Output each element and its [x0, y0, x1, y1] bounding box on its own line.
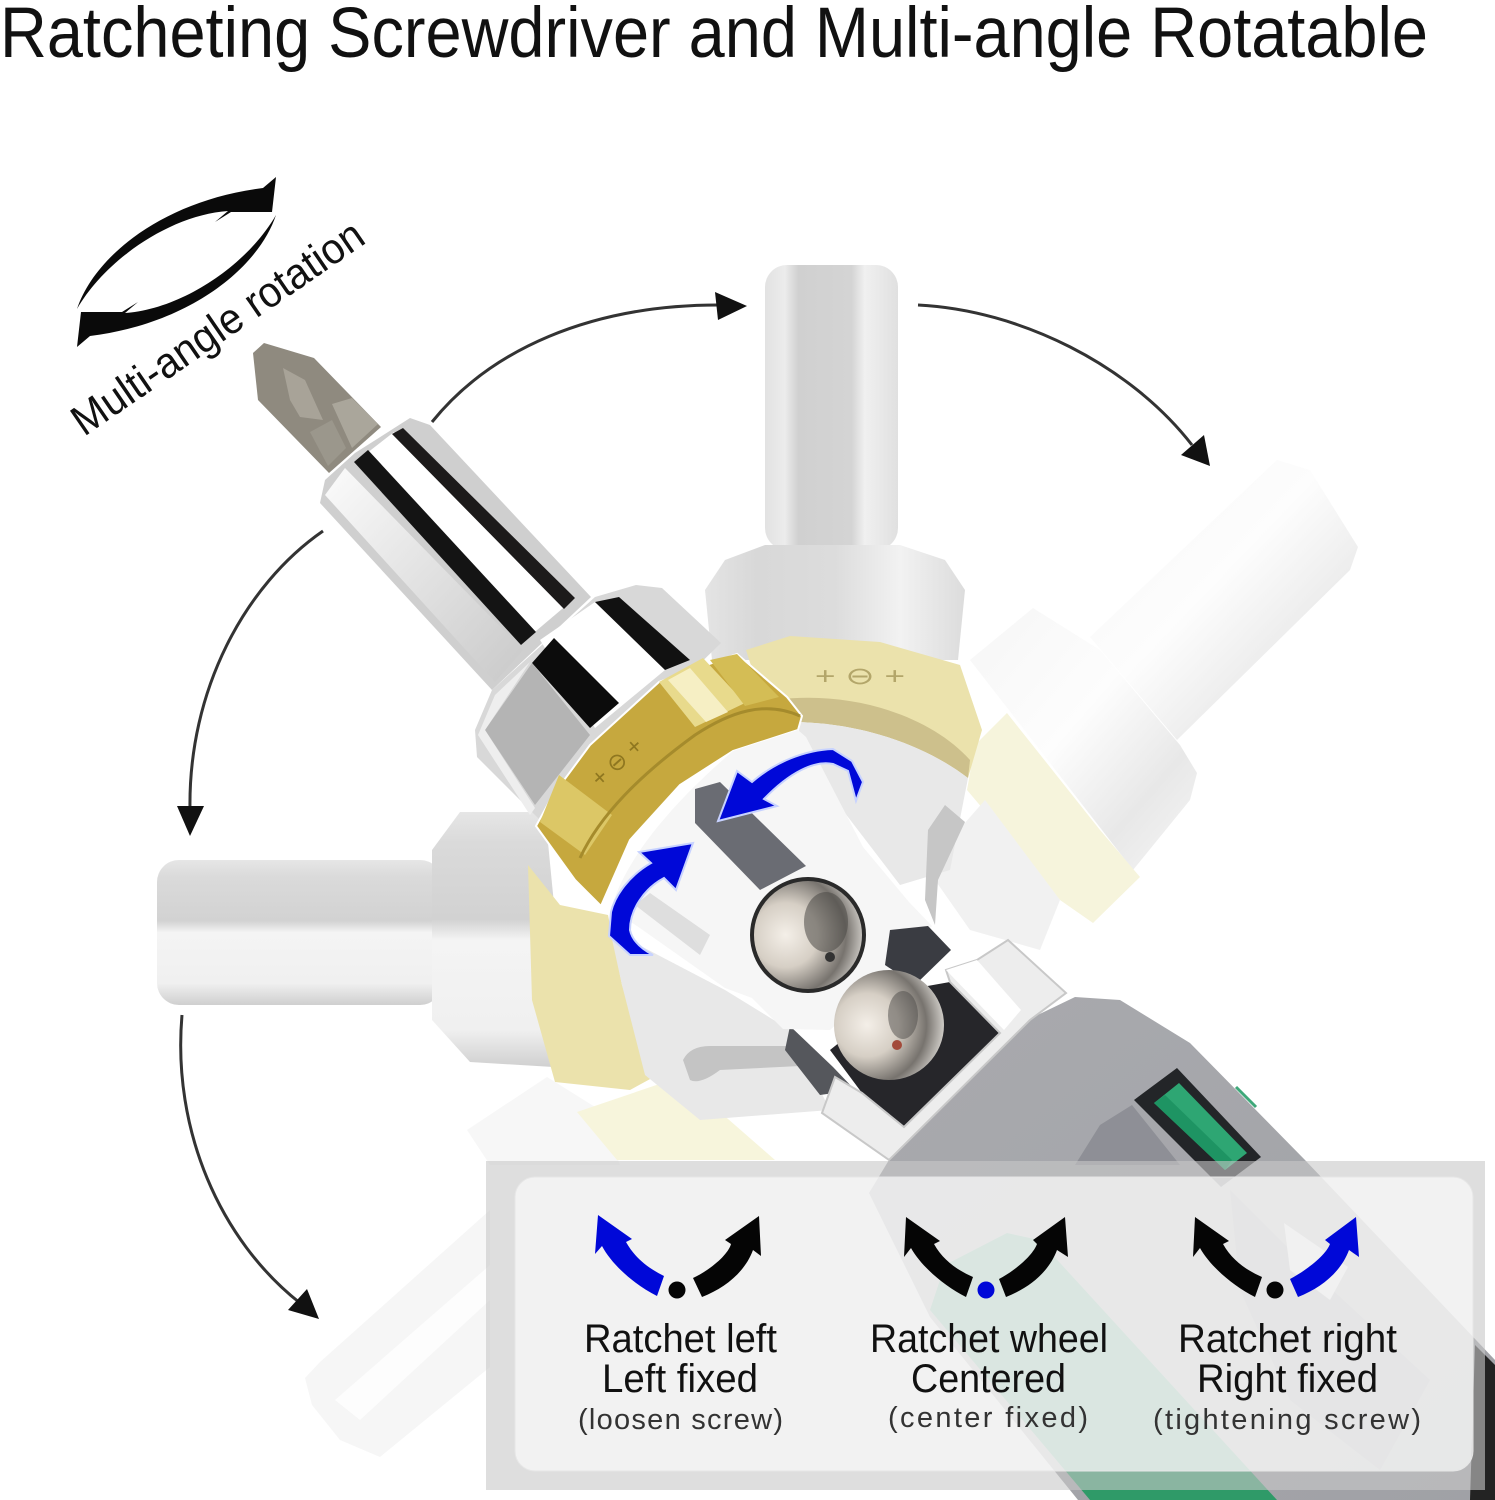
text: loosen screw: (loosen screw) [578, 1404, 783, 1436]
icon: left black arrow [904, 1217, 973, 1297]
icon: blue center dot [978, 1282, 994, 1298]
bit [253, 343, 381, 473]
ghost: bottom-left position [305, 1077, 775, 1457]
icon: right black arrow [999, 1217, 1068, 1297]
main shaft and bit [253, 343, 721, 820]
mode: ratchet wheel [870, 1217, 1108, 1434]
text: tightening screw: (tightening screw) [1153, 1404, 1421, 1436]
panel: ratchet modes [486, 1161, 1485, 1490]
arrow: tip to left position [177, 531, 323, 836]
text: centered: Centered [911, 1357, 1066, 1401]
arrow: tip to top position [432, 292, 747, 422]
icon: left black arrow [1193, 1217, 1262, 1297]
gold adjustment ring [536, 654, 802, 906]
panel inner card [515, 1177, 1473, 1471]
mode: ratchet right [1153, 1217, 1421, 1436]
icon: multi-angle rotation arrows [77, 177, 276, 347]
gold adjustment ring: + ⊖ + [586, 732, 649, 792]
text: left fixed: Left fixed [602, 1357, 758, 1401]
text: right fixed: Right fixed [1197, 1357, 1378, 1401]
icon: left blue arrow [595, 1215, 664, 1296]
icon: right blue arrow [1290, 1217, 1359, 1297]
label: multi-angle rotation: Multi-angle rotation [62, 211, 373, 445]
ghost: top position: + ⊖ + [815, 663, 905, 690]
arrow: top to right position [918, 305, 1210, 466]
icon: blue rotation arrow lower [609, 843, 693, 955]
text: ratchet wheel label: Ratchet wheel [870, 1317, 1108, 1361]
chrome joint [611, 730, 1066, 1160]
ghost: right position [935, 460, 1358, 950]
shaft reflections [392, 428, 575, 609]
icon: center dot [668, 1282, 686, 1298]
icon: center dot [1266, 1282, 1284, 1298]
text: center fixed: (center fixed) [888, 1402, 1088, 1434]
ghost: left position [157, 812, 830, 1120]
ball joint upper [752, 879, 864, 991]
arrow: left to bottom position [181, 1015, 319, 1319]
icon: blue rotation arrow upper [718, 749, 863, 821]
shaft body [320, 418, 591, 690]
ghost: top position [705, 265, 982, 925]
hex collar [475, 585, 721, 820]
icon: right black arrow [693, 1216, 761, 1297]
text: ratchet left label: Ratchet left [584, 1317, 777, 1361]
ball joint lower [834, 970, 944, 1080]
screwdriver handle [869, 997, 1495, 1500]
text: ratchet right label: Ratchet right [1178, 1317, 1397, 1361]
panel background [486, 1161, 1485, 1490]
mode: ratchet left [578, 1215, 783, 1436]
